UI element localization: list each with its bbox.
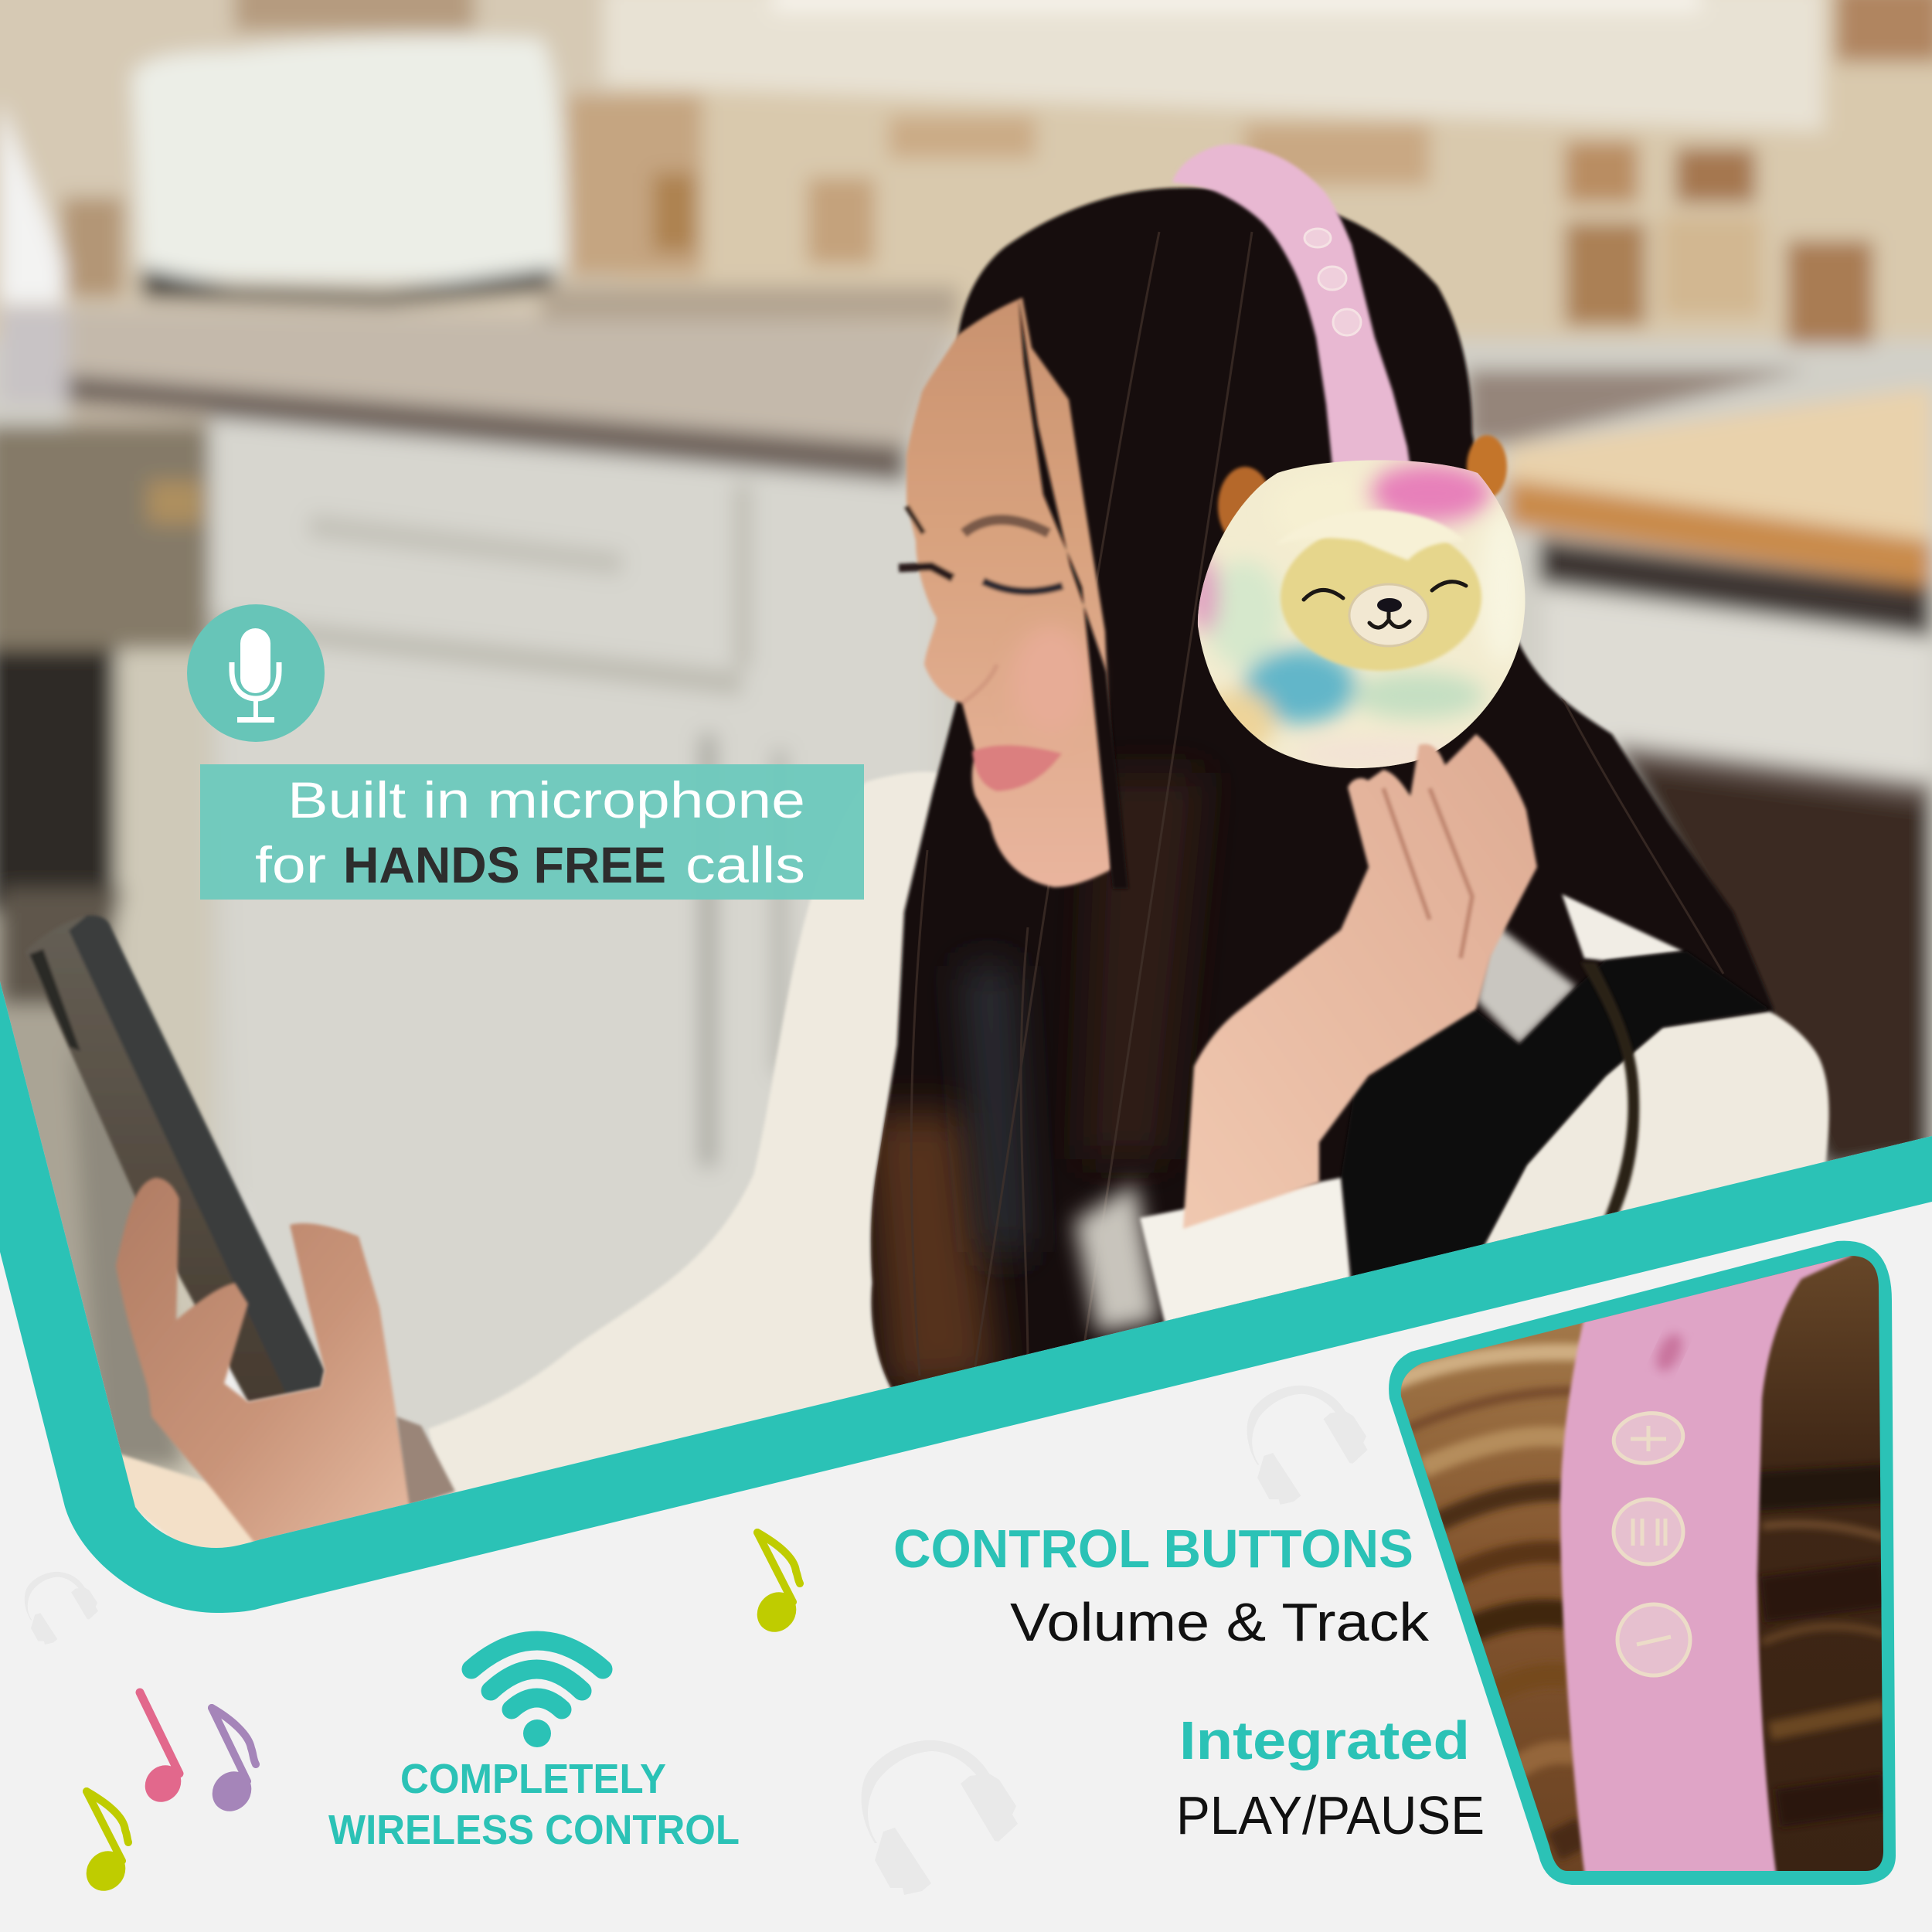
llama nose tip — [1377, 598, 1402, 612]
left eye — [899, 566, 953, 578]
music note: lime right — [749, 1532, 804, 1640]
headband buttons — [1304, 229, 1361, 335]
phone — [26, 916, 325, 1402]
faint headphones watermark large — [862, 1740, 1018, 1895]
countertop — [68, 308, 958, 452]
fine hair strands — [911, 232, 1723, 1376]
soft hair tints — [866, 232, 1723, 1391]
warm hair sheen — [1082, 773, 1206, 1159]
llama face — [1281, 524, 1481, 671]
play pause button — [1614, 1499, 1683, 1564]
llama forelock — [1275, 510, 1464, 560]
plush headband — [1172, 145, 1414, 495]
wristwatch — [396, 1417, 455, 1507]
left dark cupboard — [0, 425, 209, 649]
brown lower hair tint — [866, 1113, 997, 1391]
music note: pink — [138, 1692, 189, 1809]
ear cup ears — [1218, 435, 1507, 546]
callout line two — [255, 836, 805, 893]
kettle — [0, 100, 65, 304]
chair — [1612, 743, 1932, 1175]
control buttons subtext: Volume & Track — [1010, 1592, 1430, 1652]
volume down button — [1617, 1604, 1690, 1675]
faint headphones watermark middle — [1247, 1386, 1368, 1505]
hair left of strap — [1376, 1236, 1631, 1886]
callout line one: Built in microphone — [287, 771, 805, 828]
camera bump — [29, 949, 80, 1051]
control buttons heading: CONTROL BUTTONS — [893, 1519, 1413, 1579]
black vest — [1341, 951, 1770, 1283]
left brow — [906, 506, 923, 533]
llama plush ear cup — [1190, 435, 1530, 773]
callout line two: for — [255, 836, 326, 893]
callout line two: calls — [685, 836, 805, 893]
blue hair sheen — [962, 966, 1028, 1252]
nose shading — [962, 665, 997, 703]
hair right of strap — [1716, 1236, 1901, 1886]
hair strands — [1391, 1352, 1886, 1847]
wireless caption: COMPLETELY — [400, 1756, 666, 1802]
inset close-up of headband buttons — [1376, 1236, 1901, 1886]
phone side edge — [69, 916, 325, 1393]
integrated heading: Integrated — [1179, 1710, 1470, 1770]
hair strand across the shoulder — [1580, 962, 1639, 1229]
sweater showing through hair — [1074, 1182, 1159, 1333]
toaster — [132, 36, 567, 284]
grey collar behind hair — [1476, 920, 1577, 1045]
sweater cuff — [1140, 1178, 1351, 1325]
table top — [116, 1453, 267, 1553]
faint headphones watermark small — [25, 1572, 98, 1645]
ear cup body and fur — [1190, 456, 1530, 773]
face and neck — [899, 298, 1111, 887]
hair — [871, 188, 1774, 1399]
inset photo frame — [1389, 1241, 1896, 1885]
microphone glyph — [232, 628, 279, 723]
hand holding phone — [116, 1178, 417, 1553]
callout: built in microphone — [200, 764, 864, 900]
mic icon badge — [187, 604, 325, 742]
music note: lime left — [78, 1791, 134, 1899]
music note: purple — [204, 1708, 260, 1819]
right sleeve — [1480, 1012, 1829, 1252]
white collar — [1562, 894, 1683, 961]
wireless caption: WIRELESS CONTROL — [328, 1807, 740, 1853]
strap highlight — [1651, 1330, 1688, 1375]
icon: wifi — [471, 1641, 603, 1747]
right eye — [983, 581, 1063, 591]
callout line two: HANDS FREE — [343, 836, 666, 893]
llama eyes, nose, mouth — [1304, 582, 1466, 628]
raised hand — [1183, 734, 1537, 1229]
lips — [972, 745, 1062, 791]
teal curved band framing the photo — [0, 981, 1932, 1613]
eyebrow — [964, 519, 1049, 533]
fringe strand of hair — [1019, 298, 1128, 889]
left sweater arm — [428, 771, 958, 1515]
pink strap — [1560, 1244, 1855, 1878]
volume up button — [1611, 1409, 1686, 1468]
play pause subtext: PLAY/PAUSE — [1176, 1785, 1485, 1845]
blurred kitchen background — [0, 0, 1932, 1530]
wireless caption — [328, 1756, 740, 1853]
cheek — [1012, 626, 1090, 734]
llama snout — [1349, 584, 1428, 646]
white cabinets — [209, 417, 935, 1468]
